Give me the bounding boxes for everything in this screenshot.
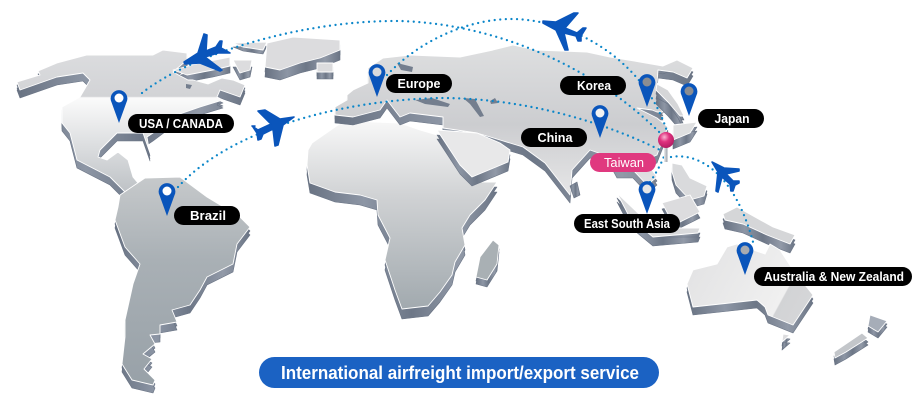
label: Brazil	[174, 206, 240, 225]
icon: plane over Pacific	[712, 162, 739, 192]
label: East South Asia: East South Asia	[584, 217, 671, 231]
label: Europe: Europe	[398, 77, 441, 91]
continent: South America	[115, 177, 250, 393]
label: Australia & New Zealand: Australia & New Zealand	[764, 270, 904, 284]
flight routes	[142, 19, 753, 242]
island: Madagascar	[476, 240, 499, 287]
icon: plane over North America	[184, 34, 230, 71]
label: Japan	[698, 109, 764, 128]
continent: Greenland	[265, 37, 340, 80]
icon: plane over Atlantic	[252, 110, 294, 146]
marker: Taiwan push pin	[658, 132, 674, 162]
continent: Australia	[687, 244, 813, 350]
label: USA / CANADA	[128, 114, 234, 133]
islands: South East Asia	[570, 163, 795, 253]
route: East South Asia	[650, 147, 667, 182]
route: Europe	[387, 19, 668, 135]
banner: service title	[259, 357, 659, 388]
label: Korea	[560, 76, 626, 95]
pin: Brazil	[159, 183, 175, 216]
pin: Europe	[369, 64, 385, 97]
label: Taiwan	[590, 153, 656, 172]
route: Australia	[671, 156, 753, 242]
continent: North America	[17, 42, 267, 200]
pin: Korea	[639, 74, 655, 107]
label: Taiwan: Taiwan	[604, 156, 644, 170]
pin: Australia	[737, 242, 753, 275]
label: Japan: Japan	[714, 112, 750, 126]
label: Australia & New Zealand	[754, 267, 912, 286]
pin: USA / Canada	[111, 90, 127, 123]
route: USA / Canada	[142, 21, 665, 138]
label: China	[521, 128, 587, 147]
label: USA / CANADA: USA / CANADA	[139, 117, 223, 131]
islands: New Zealand	[834, 315, 887, 365]
label: China: China	[538, 131, 574, 145]
label: Korea: Korea	[577, 79, 612, 93]
route: Brazil	[178, 98, 660, 187]
label: Europe	[386, 74, 452, 93]
pin: Japan	[681, 83, 697, 116]
islands: Japan	[656, 84, 697, 149]
pin: China	[592, 105, 608, 138]
icon: plane over Russia	[543, 13, 586, 50]
label: East South Asia	[574, 214, 680, 233]
continent: Eurasia	[335, 45, 693, 203]
pin: East South Asia	[639, 181, 655, 214]
label: Brazil: Brazil	[190, 209, 226, 223]
continent: Africa	[307, 120, 497, 319]
banner: service title: International airfreight import/export service	[281, 363, 639, 383]
